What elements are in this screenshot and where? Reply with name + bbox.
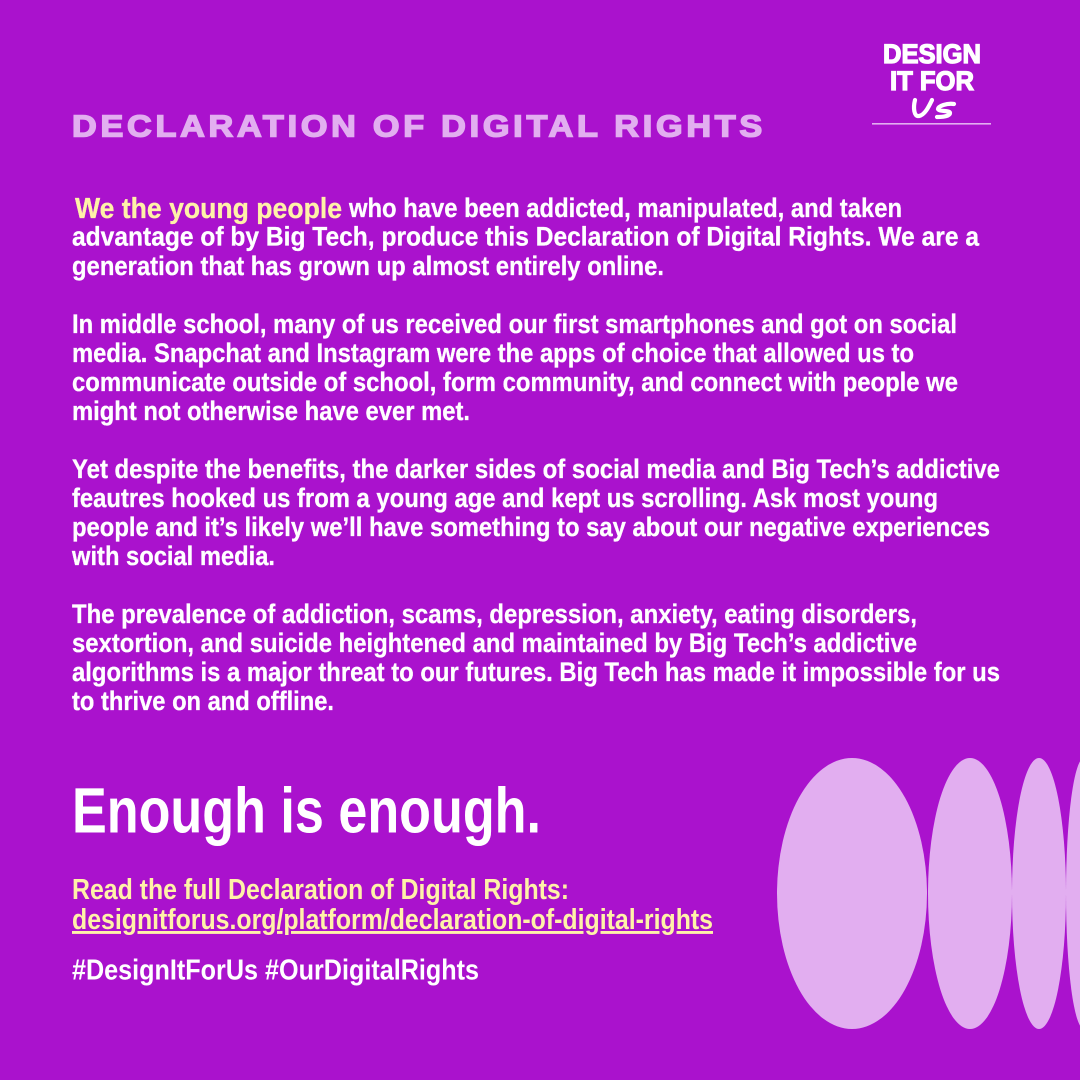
paragraph 2: In middle school, many of us received our first smartphones and got on social	[72, 309, 957, 339]
paragraph 1: We the young people	[75, 193, 342, 225]
paragraph 3: feautres hooked us from a young age and kept us scrolling. Ask most young	[72, 483, 938, 513]
paragraph 2: communicate outside of school, form community, and connect with people we	[72, 367, 958, 397]
decorative ellipses	[777, 758, 1080, 1029]
paragraph 2: media. Snapchat and Instagram were the apps of choice that allowed us to	[72, 338, 914, 368]
heading: Enough is enough: Enough is enough.	[72, 774, 541, 846]
logo: Design It For Us: IT FOR	[890, 66, 974, 96]
paragraph 1: generation that has grown up almost entirely online.	[72, 251, 664, 281]
paragraph 1	[72, 193, 980, 281]
paragraph 3: with social media.	[71, 541, 275, 571]
paragraph 3	[71, 454, 1000, 571]
paragraph 4: The prevalence of addiction, scams, depression, anxiety, eating disorders,	[72, 599, 917, 629]
paragraph 1: who have been addicted, manipulated, and taken	[348, 193, 902, 223]
logo: Design It For Us: DESIGN	[883, 39, 981, 69]
paragraph 4: to thrive on and offline.	[72, 686, 334, 716]
title: DECLARATION OF DIGITAL RIGHTS	[72, 108, 766, 144]
call to action with link: designitforus.org/platform/declaration-of-digital-rights	[72, 904, 713, 936]
paragraph 1: advantage of by Big Tech, produce this Declaration of Digital Rights. We are a	[72, 222, 980, 252]
paragraph 2	[72, 309, 958, 426]
paragraph 4	[72, 599, 1000, 716]
call to action with link: Read the full Declaration of Digital Rights:	[72, 874, 569, 906]
hashtags: #DesignItForUs #OurDigitalRights	[72, 954, 479, 986]
paragraph 2: might not otherwise have ever met.	[72, 396, 470, 426]
logo: Design It For Us	[872, 39, 991, 125]
call to action with link	[72, 874, 713, 936]
paragraph 4: sextortion, and suicide heightened and maintained by Big Tech’s addictive	[72, 628, 917, 658]
